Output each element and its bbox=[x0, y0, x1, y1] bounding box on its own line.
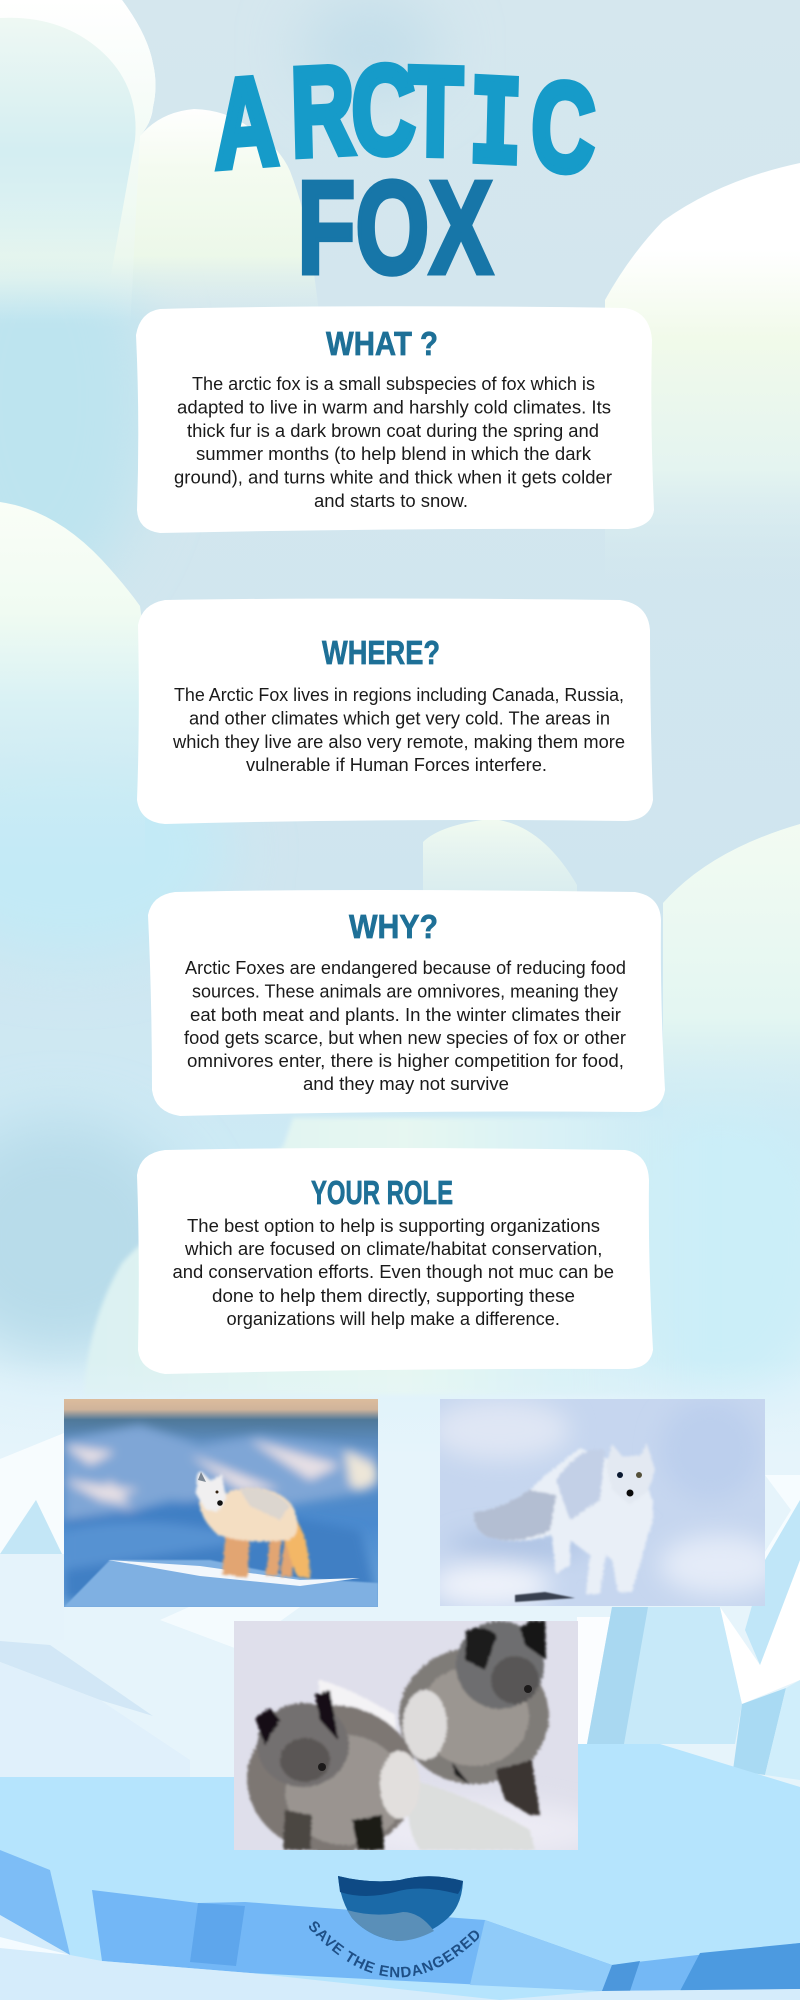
cloud: lower bbox=[84, 1118, 720, 1395]
text: why body: Arctic Foxes are endangered because of reducing food bbox=[185, 958, 626, 978]
text: what body bbox=[174, 374, 612, 511]
text: why body: food gets scarce, but when new species of fox or other bbox=[184, 1028, 626, 1048]
icon: water bowl bbox=[338, 1876, 463, 1941]
text: your role body: done to help them directly, supporting these bbox=[212, 1286, 575, 1306]
cloud: upper right bbox=[605, 163, 800, 600]
heading: why: WHY? bbox=[349, 908, 438, 945]
text: your role body: and conservation efforts. Even though not muc can be bbox=[172, 1262, 614, 1282]
text: your role body: which are focused on climate/habitat conservation, bbox=[184, 1239, 603, 1259]
ice floes background bbox=[0, 1360, 800, 1800]
photo: fox on blue ice bbox=[64, 1399, 378, 1607]
heading: your role: YOUR ROLE bbox=[311, 1174, 453, 1211]
text: what body: and starts to snow. bbox=[314, 491, 468, 511]
title: Arctic: ARCTIC bbox=[211, 40, 598, 201]
ground ice bbox=[0, 1744, 800, 2000]
text: why body: and they may not survive bbox=[303, 1074, 509, 1094]
text: what body: The arctic fox is a small subspecies of fox which is bbox=[192, 374, 595, 394]
cloud: middle left bbox=[0, 502, 145, 870]
text: save the endangered: SAVE THE ENDANGERED bbox=[309, 1921, 480, 1978]
panel: what bbox=[136, 306, 654, 533]
photo: white fox on snow bbox=[440, 1399, 765, 1606]
text: why body bbox=[184, 958, 626, 1094]
text: what body: thick fur is a dark brown coat during the spring and bbox=[187, 421, 599, 441]
text: what body: summer months (to help blend in which the dark bbox=[196, 444, 592, 464]
text: where body: vulnerable if Human Forces interfere. bbox=[246, 755, 547, 775]
text: where body bbox=[172, 685, 625, 775]
text: where body: which they live are also very remote, making them more bbox=[172, 732, 625, 752]
text: your role body: The best option to help is supporting organizations bbox=[187, 1216, 600, 1236]
text: your role body bbox=[172, 1216, 614, 1329]
logo: save the endangered bbox=[309, 1876, 480, 1978]
text: your role body: organizations will help make a difference. bbox=[226, 1309, 560, 1329]
title: Fox: FOX bbox=[297, 155, 493, 302]
text: why body: eat both meat and plants. In the winter climates their bbox=[190, 1005, 621, 1025]
panel: why bbox=[148, 890, 665, 1116]
text: what body: ground), and turns white and thick when it gets colder bbox=[174, 468, 612, 488]
text: where body: and other climates which get very cold. The areas in bbox=[189, 708, 610, 728]
heading: where: WHERE? bbox=[322, 634, 440, 671]
heading: what: WHAT ? bbox=[326, 325, 438, 362]
cloud: upper left bbox=[0, 0, 320, 330]
panel: your role bbox=[137, 1148, 653, 1374]
text: why body: sources. These animals are omnivores, meaning they bbox=[192, 982, 618, 1002]
cloud: middle centre bbox=[423, 819, 577, 895]
text: what body: adapted to live in warm and harshly cold climates. Its bbox=[177, 398, 611, 418]
photo: two dark foxes bbox=[234, 1621, 578, 1850]
text: why body: omnivores enter, there is higher competition for food, bbox=[187, 1051, 624, 1071]
cloud: middle right bbox=[663, 824, 800, 1150]
text: where body: The Arctic Fox lives in regions including Canada, Russia, bbox=[174, 685, 624, 705]
panel: where bbox=[137, 598, 653, 824]
